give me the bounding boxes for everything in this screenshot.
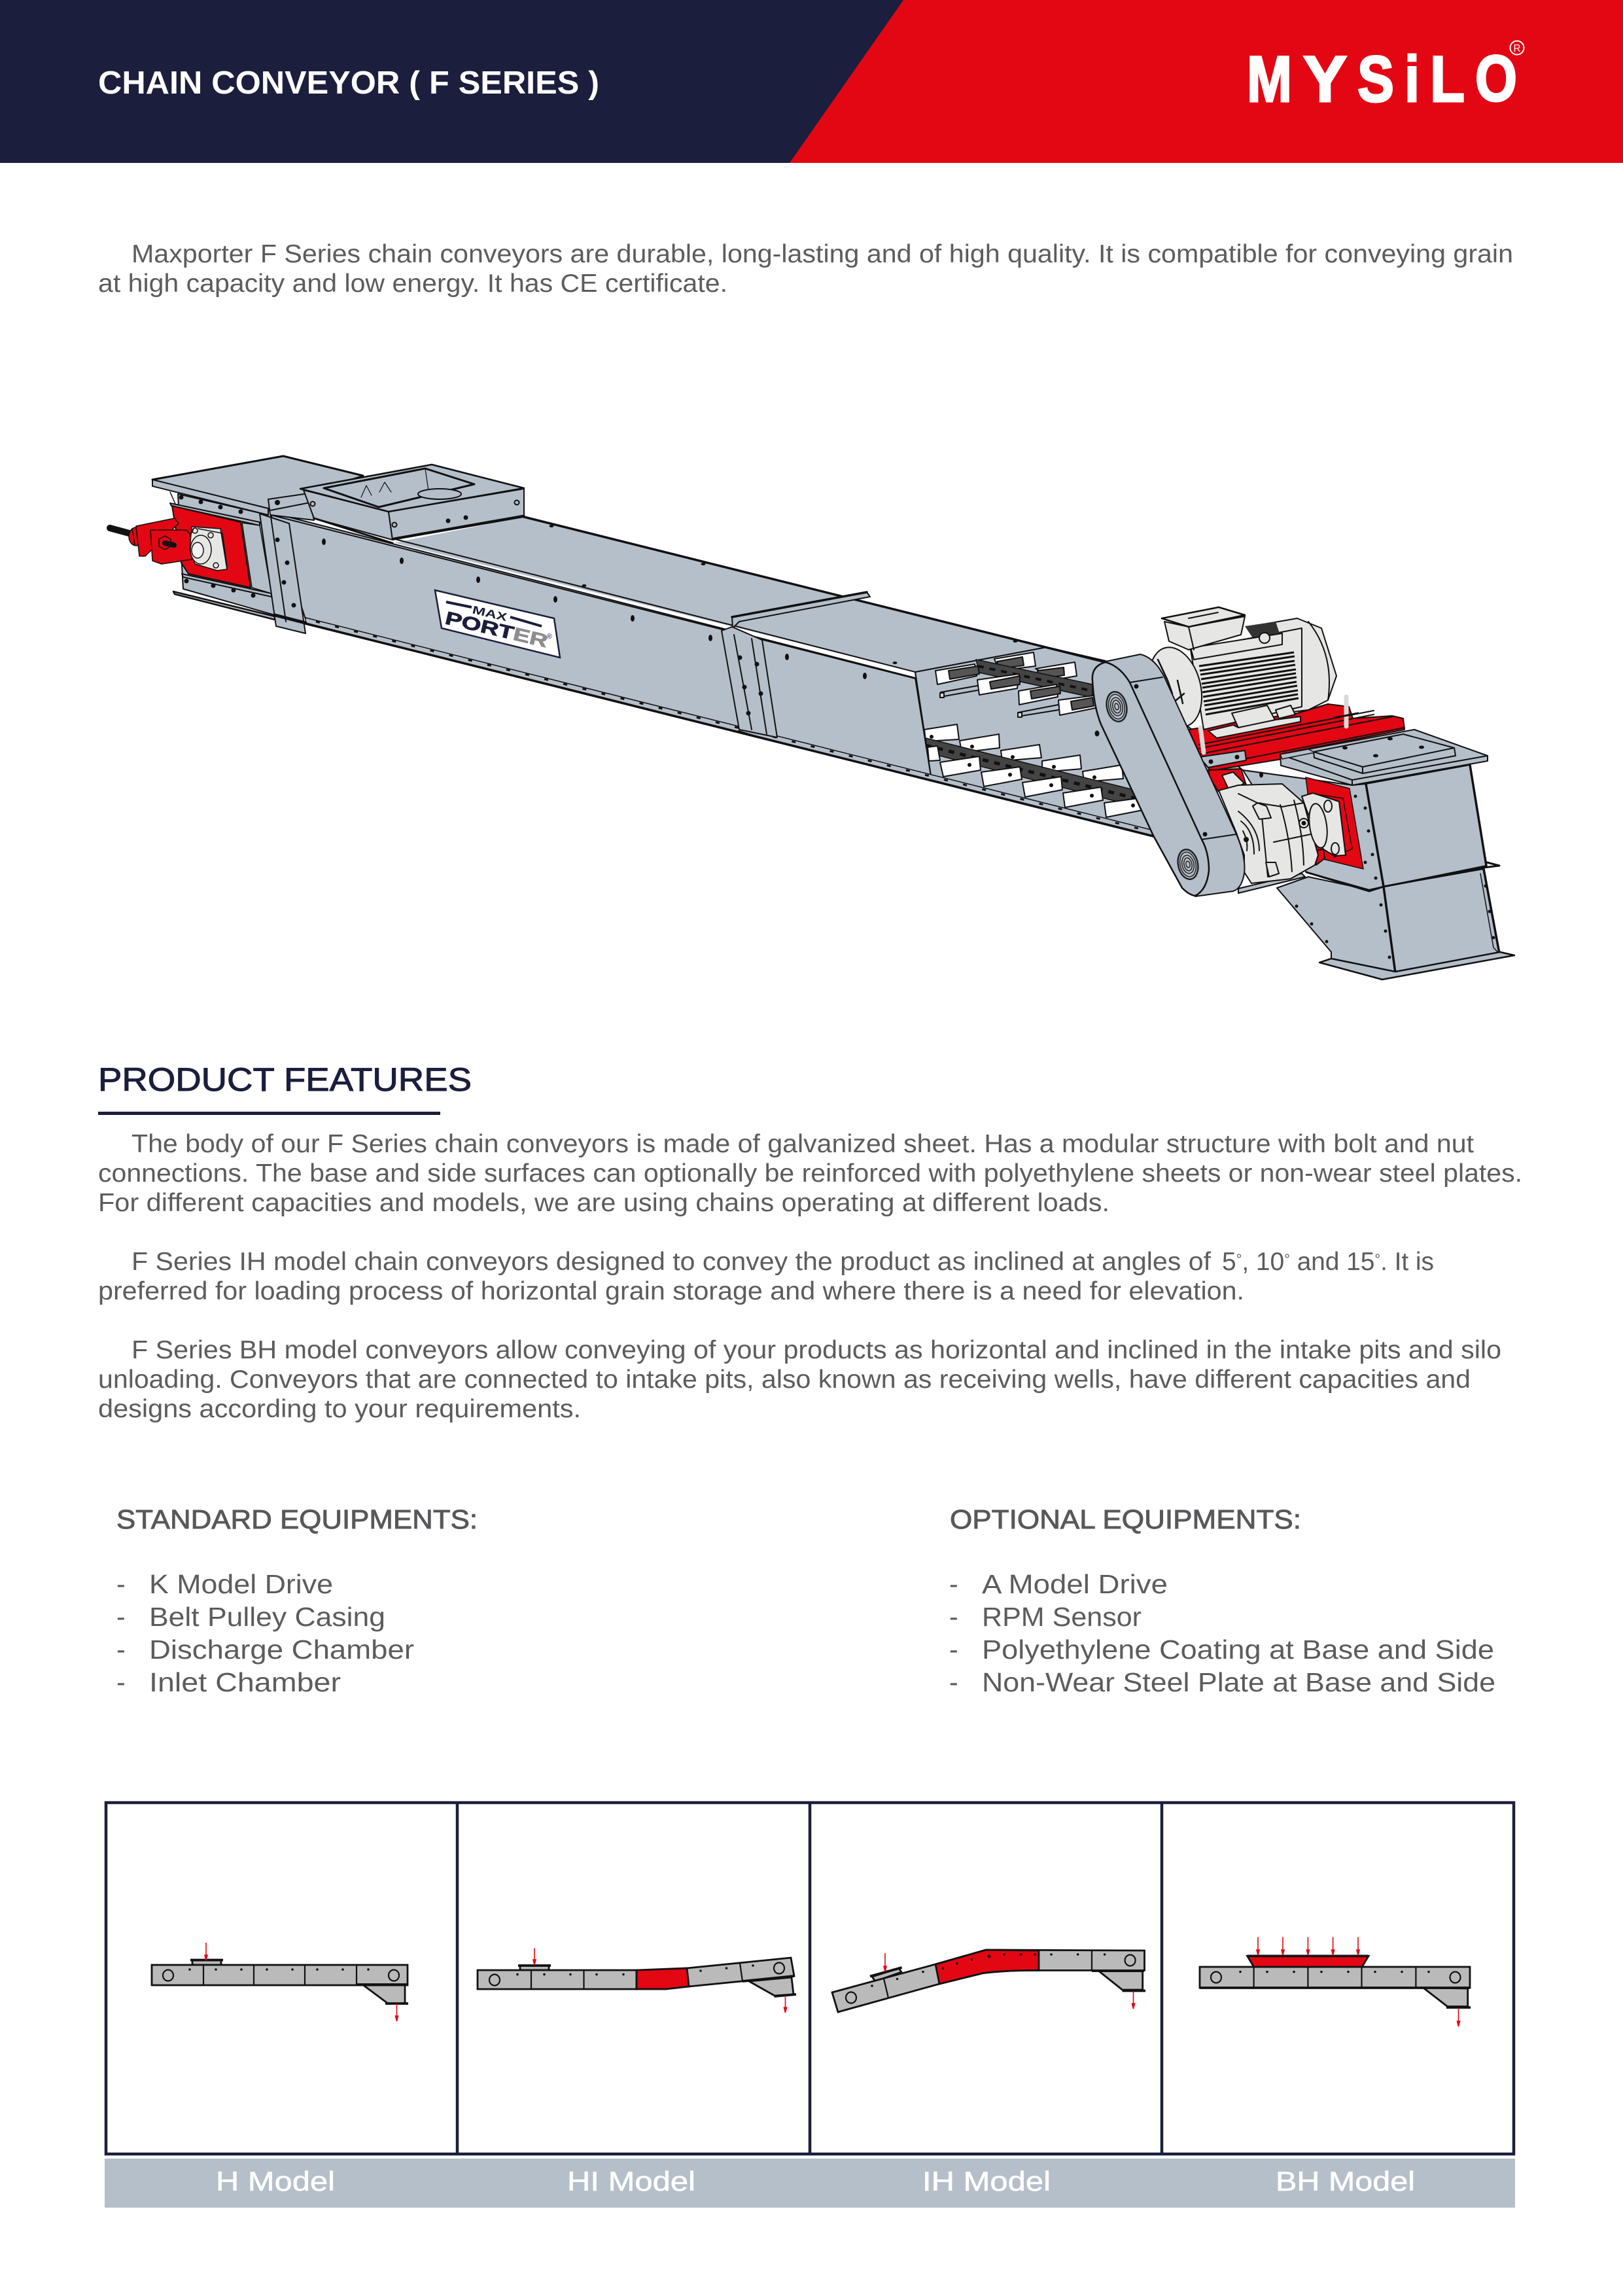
chain tensioner assembly bbox=[110, 518, 227, 571]
features paragraph 2: ° bbox=[1284, 1251, 1290, 1267]
list: optional equipments: - bbox=[949, 1569, 958, 1599]
model labels bar: BH Model bbox=[1276, 2166, 1415, 2197]
inlet chamber with top plate bbox=[152, 456, 363, 620]
gearbox bbox=[1219, 784, 1346, 893]
arrows: product flow bbox=[205, 1943, 398, 2021]
list: optional equipments bbox=[949, 1504, 1495, 1697]
heading: product features: PRODUCT FEATURES bbox=[98, 1061, 472, 1098]
logo: MYSILO bbox=[1247, 41, 1524, 115]
list: optional equipments: - bbox=[949, 1667, 958, 1697]
model labels bar: IH Model bbox=[922, 2166, 1051, 2197]
red drive-side plate bbox=[1306, 777, 1363, 869]
Max Porter sign: MAX bbox=[471, 603, 509, 624]
features paragraph 3: F Series BH model conveyors allow conveying of your products as horizontal and inclined in the intake pits and silo bbox=[131, 1336, 1501, 1364]
intro paragraph: at high capacity and low energy. It has CE certificate. bbox=[98, 270, 727, 298]
list: optional equipments: OPTIONAL EQUIPMENTS: bbox=[950, 1504, 1301, 1534]
intro paragraph: Maxporter F Series chain conveyors are durable, long-lasting and of high quality. It is compatible for conveying grain bbox=[131, 240, 1513, 268]
features paragraph 2: ° bbox=[1236, 1251, 1242, 1267]
list: standard equipments: - bbox=[116, 1569, 126, 1599]
Max Porter sign: ® bbox=[546, 632, 553, 641]
model labels bar bbox=[105, 2159, 1515, 2208]
lower red support bbox=[1208, 769, 1325, 865]
panel: IH model diagram bbox=[832, 1950, 1145, 2012]
conveyor body: top cover, side panel and open back wall bbox=[270, 507, 1243, 836]
list: optional equipments: Non-Wear Steel Plate at Base and Side bbox=[982, 1667, 1495, 1697]
list: standard equipments: - bbox=[116, 1634, 126, 1665]
features paragraph 2: 5 bbox=[1222, 1248, 1236, 1276]
casing vents bbox=[1104, 690, 1200, 881]
steel bracket bbox=[1199, 749, 1315, 768]
list: standard equipments: K Model Drive bbox=[149, 1569, 333, 1599]
model labels bar: H Model bbox=[216, 2166, 335, 2197]
arrows: product flow bbox=[884, 1953, 1134, 2009]
logo: MYSILO: R bbox=[1514, 43, 1520, 54]
page title: CHAIN CONVEYOR ( F SERIES ) bbox=[98, 65, 599, 101]
list: standard equipments: Belt Pulley Casing bbox=[149, 1602, 385, 1632]
list: optional equipments: - bbox=[949, 1634, 958, 1665]
list: optional equipments: RPM Sensor bbox=[982, 1602, 1142, 1632]
discharge chamber bbox=[1243, 730, 1514, 980]
electric motor bbox=[1141, 607, 1336, 738]
features paragraph 1: connections. The base and side surfaces can optionally be reinforced with polyethylene sheets or non-wear steel plates. bbox=[98, 1159, 1522, 1188]
features paragraph 1 bbox=[98, 1130, 1522, 1217]
logo: MYSILO: Y bbox=[1303, 43, 1347, 115]
list: standard equipments: Inlet Chamber bbox=[149, 1667, 341, 1697]
list: standard equipments: Discharge Chamber bbox=[149, 1634, 414, 1665]
list: optional equipments: Polyethylene Coating at Base and Side bbox=[982, 1634, 1494, 1665]
red motor base rails bbox=[1189, 697, 1405, 771]
lower working chain and scraper slats bbox=[924, 724, 1143, 817]
side and cover fasteners bbox=[322, 525, 1099, 737]
intro paragraph bbox=[98, 240, 1513, 298]
logo: MYSILO: S bbox=[1357, 43, 1394, 115]
chain conveyor illustration bbox=[110, 456, 1514, 980]
list: standard equipments: - bbox=[116, 1602, 126, 1632]
end flange of the first section bbox=[260, 493, 314, 633]
panel: BH model diagram bbox=[1200, 1937, 1471, 2026]
features paragraph 3: designs according to your requirements. bbox=[98, 1395, 581, 1423]
features paragraph 3: unloading. Conveyors that are connected to intake pits, also known as receiving wells, have different capacities and bbox=[98, 1366, 1471, 1394]
list: standard equipments: - bbox=[116, 1667, 126, 1697]
Max Porter sign bbox=[435, 590, 560, 658]
model labels bar: HI Model bbox=[567, 2166, 695, 2197]
list: optional equipments: - bbox=[949, 1602, 958, 1632]
logo: MYSILO: O bbox=[1475, 42, 1517, 115]
list: standard equipments: STANDARD EQUIPMENTS: bbox=[116, 1504, 478, 1534]
features paragraph 2: and 15 bbox=[1290, 1248, 1374, 1276]
logo: MYSILO: i bbox=[1405, 43, 1420, 115]
model panels frame bbox=[106, 1803, 1514, 2154]
features paragraph 2: , 10 bbox=[1242, 1248, 1284, 1276]
upper return chain and scraper slats bbox=[935, 652, 1096, 717]
logo: MYSILO: M bbox=[1247, 43, 1292, 115]
heading: product features bbox=[98, 1061, 472, 1115]
arrows: product flow bbox=[533, 1949, 786, 2013]
features paragraph 2: . It is bbox=[1380, 1248, 1434, 1276]
list: optional equipments: A Model Drive bbox=[982, 1569, 1168, 1599]
list: standard equipments bbox=[116, 1504, 478, 1697]
panel: H model diagram bbox=[152, 1943, 408, 2021]
Max Porter sign: PORT ER bbox=[444, 608, 550, 651]
features paragraph 2 bbox=[98, 1248, 1434, 1305]
panel: HI model diagram bbox=[478, 1949, 796, 2013]
features paragraph 2: F Series IH model chain conveyors designed to convey the product as inclined at angles of bbox=[131, 1248, 1211, 1276]
features paragraph 1: For different capacities and models, we are using chains operating at different loads. bbox=[98, 1189, 1109, 1217]
features paragraph 2: preferred for loading process of horizontal grain storage and where there is a need for elevation. bbox=[98, 1277, 1244, 1305]
lower bolted flange bbox=[305, 618, 1153, 836]
header banner bbox=[0, 0, 1623, 163]
features paragraph 3 bbox=[98, 1336, 1501, 1423]
features paragraph 1: The body of our F Series chain conveyors is made of galvanized sheet. Has a modular structure with bolt and nut bbox=[131, 1130, 1474, 1158]
section joint with second cover flange bbox=[722, 592, 870, 739]
logo: MYSILO: L bbox=[1430, 43, 1465, 115]
arrows: product flow bbox=[1257, 1937, 1460, 2026]
features paragraph 2: ° bbox=[1374, 1251, 1380, 1267]
inlet hopper bbox=[300, 465, 524, 543]
belt pulley casing bbox=[1092, 654, 1244, 896]
red tensioner plate bbox=[172, 506, 251, 588]
